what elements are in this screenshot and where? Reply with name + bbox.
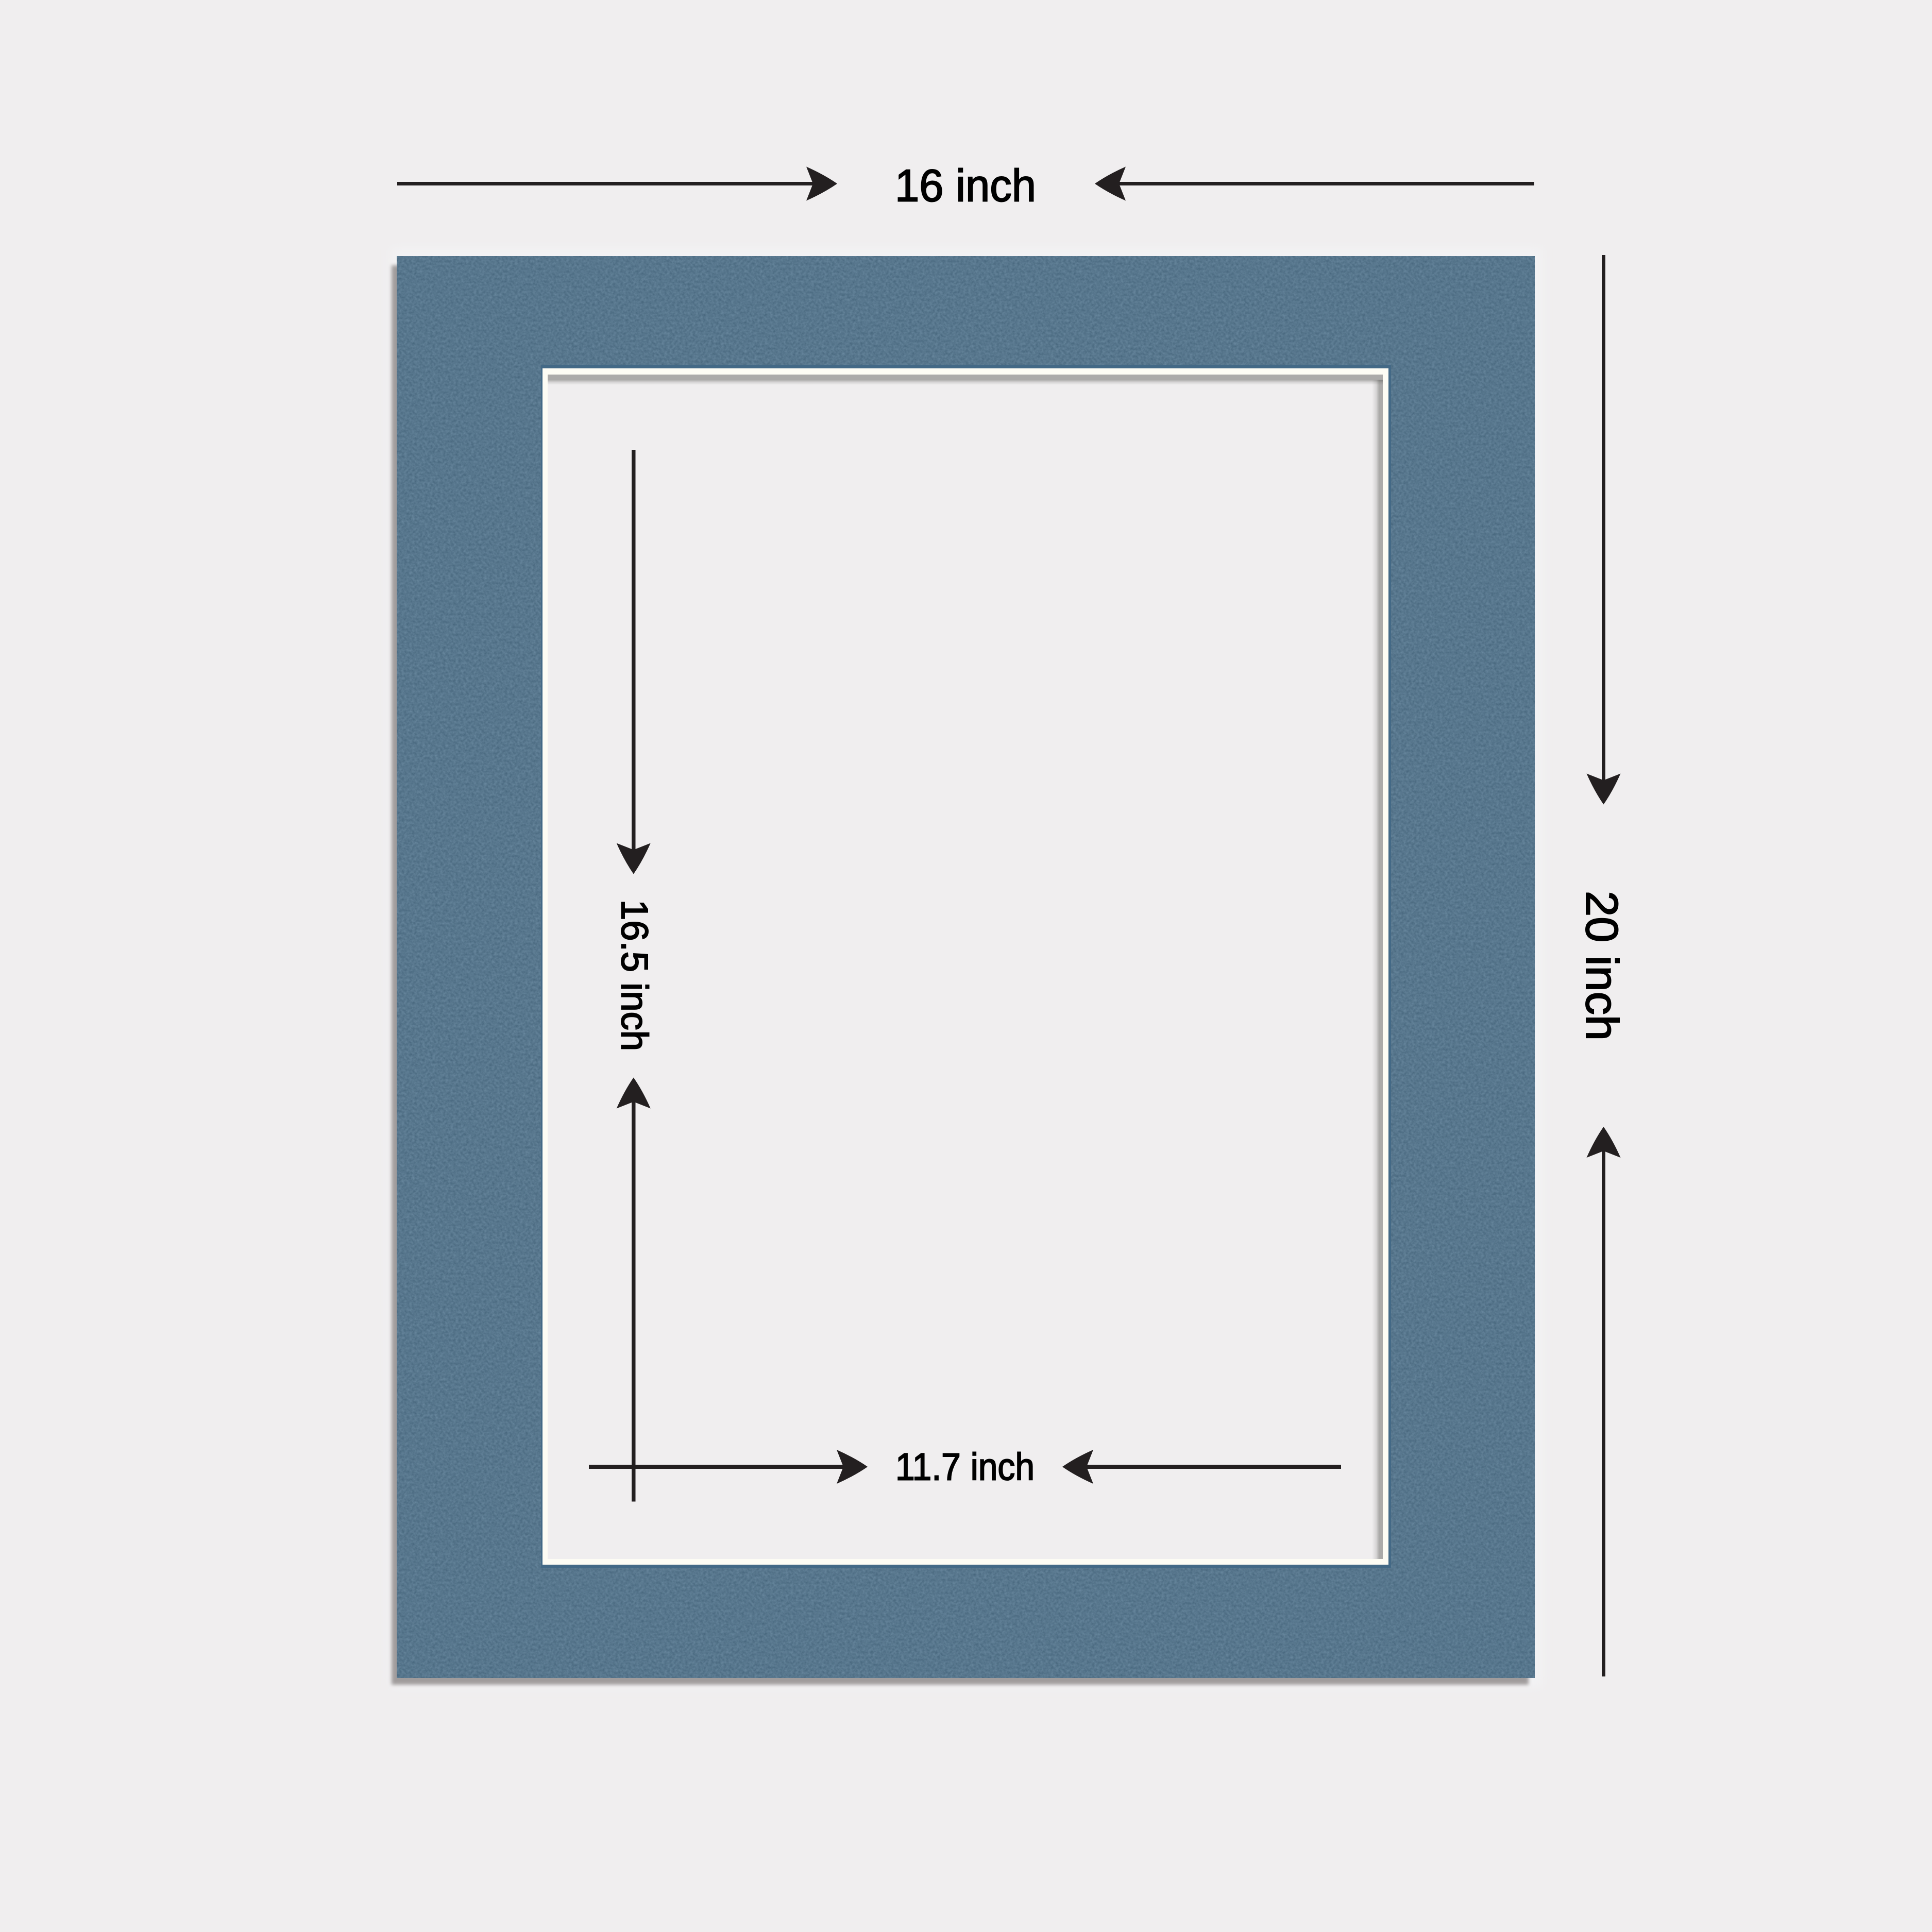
board drop shadow (392, 265, 1529, 1685)
window bevel edge (541, 365, 1391, 1568)
label: 11.7 inch: 11.7 inch (895, 1446, 1035, 1488)
arrow: inner width, pointing right (589, 1450, 868, 1484)
arrow: inner height, pointing down (617, 450, 651, 874)
window cream border (543, 368, 1388, 1565)
arrow: right side, pointing up (1587, 1127, 1621, 1676)
arrow: inner height, pointing up (617, 1078, 651, 1501)
window top inner shadow (548, 375, 1383, 385)
label: 16.5 inch: 16.5 inch (614, 900, 655, 1051)
label: 16 inch: 16 inch (895, 160, 1036, 211)
window right inner shadow (1372, 380, 1383, 1559)
arrow: inner width, pointing left (1062, 1450, 1341, 1484)
arrow: top left, pointing right (397, 167, 837, 201)
board surface (397, 256, 1535, 1678)
board tone (397, 256, 1535, 1678)
arrow: right side, pointing down (1587, 255, 1621, 805)
panel: mat board (392, 249, 1541, 1686)
window opening (548, 375, 1383, 1559)
arrow: top right, pointing left (1095, 167, 1534, 201)
label: 20 inch: 20 inch (1577, 891, 1628, 1041)
soft halo around board (392, 249, 1541, 1686)
